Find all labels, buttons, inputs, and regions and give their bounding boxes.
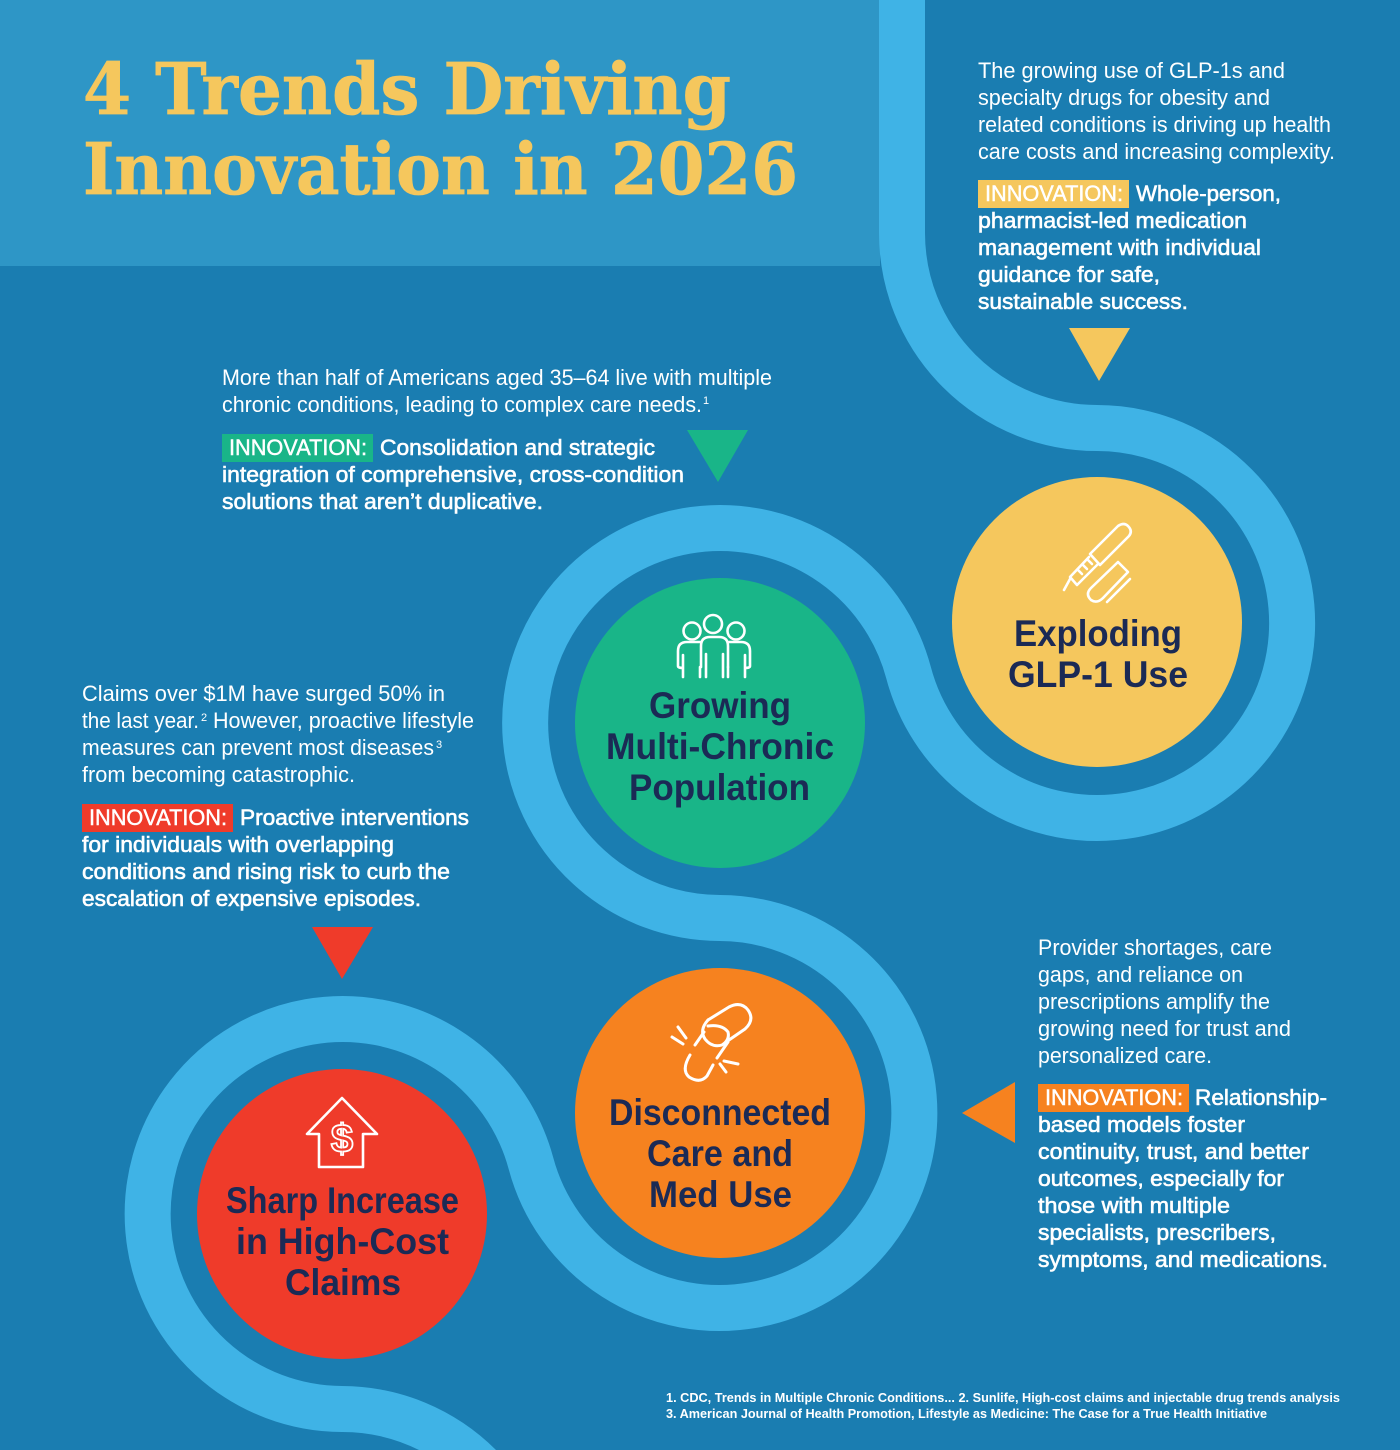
- panel: multi-chronic text: solutions that aren’t duplicative.: [222, 489, 543, 514]
- panel: GLP-1 text: sustainable success.: [978, 289, 1188, 314]
- panel: high-cost claims text: conditions and rising risk to curb the: [82, 859, 450, 884]
- panel: disconnected care text: those with multiple: [1038, 1193, 1230, 1218]
- panel: disconnected care text: specialists, prescribers,: [1038, 1220, 1276, 1245]
- circle: Disconnected Care and Med Use: Disconnected: [609, 1092, 831, 1133]
- panel: disconnected care text: growing need for trust and: [1038, 1016, 1291, 1041]
- panel: disconnected care text: INNOVATION:: [1045, 1085, 1183, 1110]
- icon: group of people: [678, 615, 750, 677]
- arrow: green: [687, 430, 748, 482]
- panel: disconnected care text: based models foster: [1038, 1112, 1245, 1137]
- panel: multi-chronic text: [222, 365, 772, 514]
- circle: Disconnected Care and Med Use: Med Use: [649, 1174, 792, 1215]
- panel: multi-chronic text: integration of comprehensive, cross-condition: [222, 462, 684, 487]
- panel: multi-chronic text: Consolidation and strategic: [380, 435, 655, 460]
- panel: high-cost claims text: INNOVATION:: [89, 805, 227, 830]
- panel: disconnected care text: gaps, and reliance on: [1038, 962, 1243, 987]
- circle: Disconnected Care and Med Use: [575, 968, 865, 1258]
- icon: broken chain link: [672, 1005, 751, 1080]
- circle: Exploding GLP-1 Use: Exploding: [1014, 613, 1182, 654]
- panel: GLP-1 text: management with individual: [978, 235, 1261, 260]
- circle: Growing Multi-Chronic Population: [575, 578, 865, 868]
- panel: disconnected care text: Relationship-: [1195, 1085, 1327, 1110]
- header band: [0, 0, 880, 266]
- panel: GLP-1 text: [978, 58, 1335, 314]
- title: [83, 47, 798, 211]
- panel: disconnected care text: Provider shortages, care: [1038, 935, 1272, 960]
- icon: house with dollar sign: [307, 1098, 377, 1167]
- panel: disconnected care text: outcomes, especially for: [1038, 1166, 1284, 1191]
- icon: house with dollar sign: $: [331, 1117, 353, 1161]
- panel: disconnected care text: personalized care.: [1038, 1043, 1212, 1068]
- circle: Sharp Increase in High-Cost Claims: Sharp Increase: [226, 1180, 459, 1221]
- arrow: yellow: [1069, 328, 1130, 381]
- panel: GLP-1 text: related conditions is driving up health: [978, 112, 1331, 137]
- panel: multi-chronic text: More than half of Americans aged 35–64 live with multiple: [222, 365, 772, 390]
- panel: high-cost claims text: 2: [201, 712, 207, 724]
- panel: high-cost claims text: However, proactive lifestyle: [213, 708, 474, 733]
- circle: Sharp Increase in High-Cost Claims: [197, 1069, 487, 1359]
- circle: Growing Multi-Chronic Population: Multi-Chronic: [606, 726, 834, 767]
- panel: high-cost claims text: for individuals with overlapping: [82, 832, 394, 857]
- panel: GLP-1 text: pharmacist-led medication: [978, 208, 1247, 233]
- panel: high-cost claims text: 3: [436, 739, 442, 751]
- panel: GLP-1 text: INNOVATION:: [985, 181, 1123, 206]
- panel: high-cost claims text: the last year.: [82, 708, 199, 733]
- panel: GLP-1 text: Whole-person,: [1136, 181, 1281, 206]
- panel: multi-chronic text: 1: [703, 395, 709, 407]
- footnotes: [666, 1391, 1340, 1421]
- panel: disconnected care text: symptoms, and medications.: [1038, 1247, 1328, 1272]
- panel: GLP-1 text: care costs and increasing complexity.: [978, 139, 1335, 164]
- arrow: orange: [962, 1082, 1015, 1143]
- panel: disconnected care text: prescriptions amplify the: [1038, 989, 1270, 1014]
- circle: Growing Multi-Chronic Population: Population: [629, 767, 810, 808]
- panel: multi-chronic text: chronic conditions, leading to complex care needs.: [222, 392, 702, 417]
- panel: high-cost claims text: from becoming catastrophic.: [82, 762, 355, 787]
- title: Innovation in 2026: [83, 127, 798, 211]
- panel: high-cost claims text: [82, 681, 474, 911]
- panel: high-cost claims text: measures can prevent most diseases: [82, 735, 434, 760]
- icon: injection pen: [1064, 524, 1131, 602]
- circle: Exploding GLP-1 Use: [952, 477, 1242, 767]
- arrow: red: [312, 927, 373, 979]
- panel: GLP-1 text: The growing use of GLP-1s and: [978, 58, 1285, 83]
- panel: GLP-1 text: guidance for safe,: [978, 262, 1160, 287]
- panel: high-cost claims text: Proactive interventions: [240, 805, 469, 830]
- panel: disconnected care text: continuity, trust, and better: [1038, 1139, 1309, 1164]
- circle: Exploding GLP-1 Use: GLP-1 Use: [1008, 654, 1188, 695]
- panel: disconnected care text: [1038, 935, 1328, 1272]
- panel: high-cost claims text: escalation of expensive episodes.: [82, 886, 421, 911]
- panel: GLP-1 text: specialty drugs for obesity and: [978, 85, 1270, 110]
- circle: Growing Multi-Chronic Population: Growing: [649, 685, 791, 726]
- title: 4 Trends Driving: [83, 47, 731, 131]
- footnotes: 3. American Journal of Health Promotion, Lifestyle as Medicine: The Case for a True Health Initiative: [666, 1407, 1267, 1421]
- footnotes: 1. CDC, Trends in Multiple Chronic Conditions... 2. Sunlife, High-cost claims and injectable drug trends analysis: [666, 1391, 1340, 1405]
- circle: Sharp Increase in High-Cost Claims: Claims: [285, 1262, 401, 1303]
- panel: multi-chronic text: INNOVATION:: [229, 435, 367, 460]
- circle: Disconnected Care and Med Use: Care and: [647, 1133, 793, 1174]
- circle: Sharp Increase in High-Cost Claims: in High-Cost: [236, 1221, 449, 1262]
- panel: high-cost claims text: Claims over $1M have surged 50% in: [82, 681, 445, 706]
